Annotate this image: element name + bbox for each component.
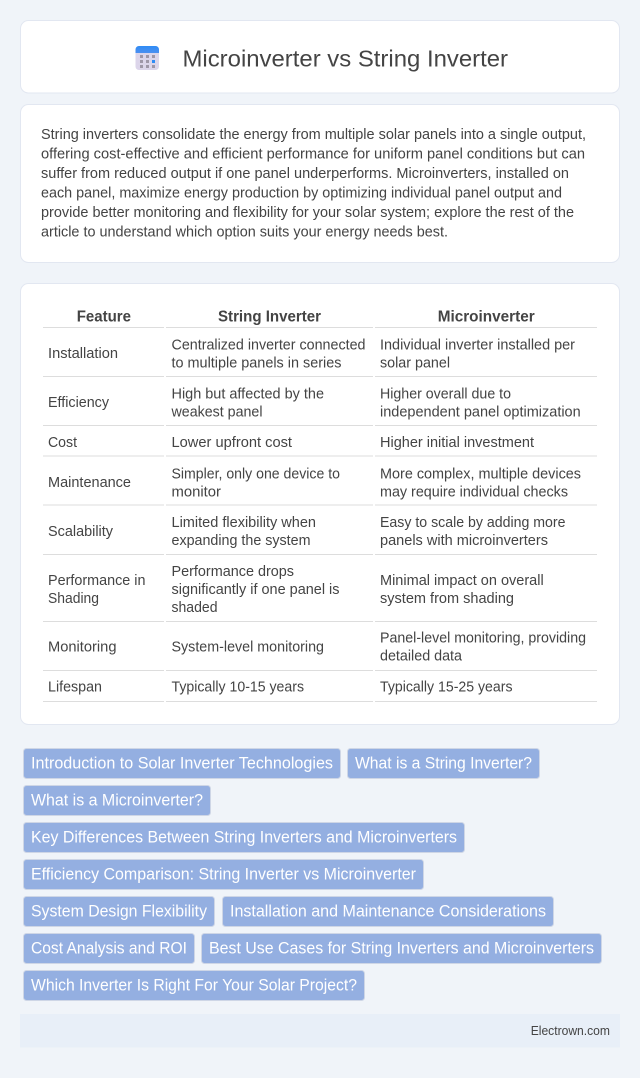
panel: topic tags	[24, 748, 602, 1000]
tag	[348, 748, 540, 778]
footer: Electrown.com	[531, 1024, 610, 1038]
row: efficiency	[48, 386, 581, 420]
tag: Efficiency Comparison: String Inverter vs Microinverter	[31, 866, 417, 884]
row: efficiency: Efficiency	[48, 395, 110, 411]
tag: What is a String Inverter?	[355, 754, 532, 772]
row: performance in shading	[48, 564, 544, 616]
row: lifespan: Lifespan	[48, 680, 102, 696]
row: cost: Higher initial investment	[380, 435, 534, 451]
text block: intro: each panel, maximize energy production by optimizing individual panel output and	[41, 185, 562, 201]
row: efficiency: Higher overall due to	[380, 386, 511, 402]
row: scalability: Easy to scale by adding more	[380, 515, 566, 531]
row: performance in shading: Performance drops	[172, 564, 294, 580]
tag: Cost Analysis and ROI	[31, 940, 187, 958]
row: monitoring: Monitoring	[48, 640, 116, 656]
row: installation: solar panel	[380, 356, 450, 372]
row: performance in shading: system from shading	[380, 591, 514, 607]
row: monitoring: System-level monitoring	[172, 640, 324, 656]
row: installation: to multiple panels in series	[172, 356, 342, 372]
text block: intro: String inverters consolidate the energy from multiple solar panels into a single output,	[41, 127, 586, 143]
row: installation: Centralized inverter connected	[172, 337, 366, 353]
tag: Installation and Maintenance Considerations	[230, 902, 546, 920]
row: performance in shading: significantly if one panel is	[172, 582, 340, 598]
tag	[24, 748, 340, 778]
text block: intro: suffer from reduced output if one panel underperforms. Microinverters, installed on	[41, 166, 569, 182]
panel: intro paragraph	[20, 104, 620, 262]
row: maintenance: monitor	[172, 484, 221, 500]
title: Microinverter vs String Inverter	[182, 46, 508, 72]
row: scalability: expanding the system	[172, 533, 311, 549]
row: monitoring	[48, 630, 586, 664]
tag	[24, 860, 424, 890]
tag: What is a Microinverter?	[31, 792, 203, 810]
tag	[222, 896, 554, 926]
row: performance in shading: Performance in	[48, 573, 146, 589]
footer	[20, 1014, 620, 1048]
text block: intro: provide better monitoring and flexibility for your solar system; explore the rest of the	[41, 205, 574, 221]
row: maintenance: More complex, multiple devices	[380, 466, 581, 482]
tag	[24, 934, 194, 964]
text block: intro: article to understand which option suits your energy needs best.	[41, 224, 448, 240]
row: installation: Installation	[48, 346, 118, 362]
tag: Introduction to Solar Inverter Technologies	[31, 754, 333, 772]
text block: intro: offering cost-effective and efficient performance for uniform panel conditions but can	[41, 146, 585, 162]
table header row: String Inverter	[218, 308, 321, 326]
table header row: Microinverter	[438, 308, 535, 326]
tag	[24, 786, 210, 816]
row: lifespan	[48, 680, 512, 696]
tag: Best Use Cases for String Inverters and Microinverters	[209, 940, 594, 958]
row: maintenance	[48, 466, 581, 500]
tag: Key Differences Between String Inverters and Microinverters	[31, 828, 457, 846]
table header row: Feature	[77, 308, 131, 326]
row: performance in shading: shaded	[172, 600, 218, 616]
row: lifespan: Typically 10-15 years	[172, 680, 304, 696]
row: cost: Lower upfront cost	[172, 435, 292, 451]
row: installation: Individual inverter installed per	[380, 337, 575, 353]
row: installation	[48, 337, 575, 372]
row: scalability: Limited flexibility when	[172, 515, 316, 531]
panel: header	[20, 20, 620, 93]
row: scalability: Scalability	[48, 524, 114, 540]
tag	[24, 822, 464, 852]
tag	[24, 896, 214, 926]
row: lifespan: Typically 15-25 years	[380, 680, 512, 696]
icon: calendar grid	[136, 46, 159, 70]
row: monitoring: detailed data	[380, 648, 462, 664]
row: cost: Cost	[48, 435, 77, 451]
text block: intro	[41, 127, 586, 240]
row: efficiency: independent panel optimization	[380, 404, 581, 420]
row: maintenance: may require individual checks	[380, 484, 568, 500]
panel: comparison table	[20, 284, 620, 724]
row: performance in shading: Minimal impact on overall	[380, 573, 544, 589]
row: scalability	[48, 515, 566, 549]
tag: Which Inverter Is Right For Your Solar Project?	[31, 976, 357, 994]
tag: System Design Flexibility	[31, 902, 208, 920]
row: maintenance: Simpler, only one device to	[172, 466, 340, 482]
row: efficiency: weakest panel	[171, 404, 262, 420]
row: cost	[48, 435, 534, 451]
row: scalability: panels with microinverters	[380, 533, 548, 549]
table header row	[77, 308, 535, 326]
tag	[24, 970, 364, 1000]
row: maintenance: Maintenance	[48, 475, 131, 491]
row: performance in shading: Shading	[48, 591, 99, 607]
tag	[202, 934, 602, 964]
row: efficiency: High but affected by the	[172, 386, 324, 402]
row: monitoring: Panel-level monitoring, providing	[380, 630, 586, 646]
